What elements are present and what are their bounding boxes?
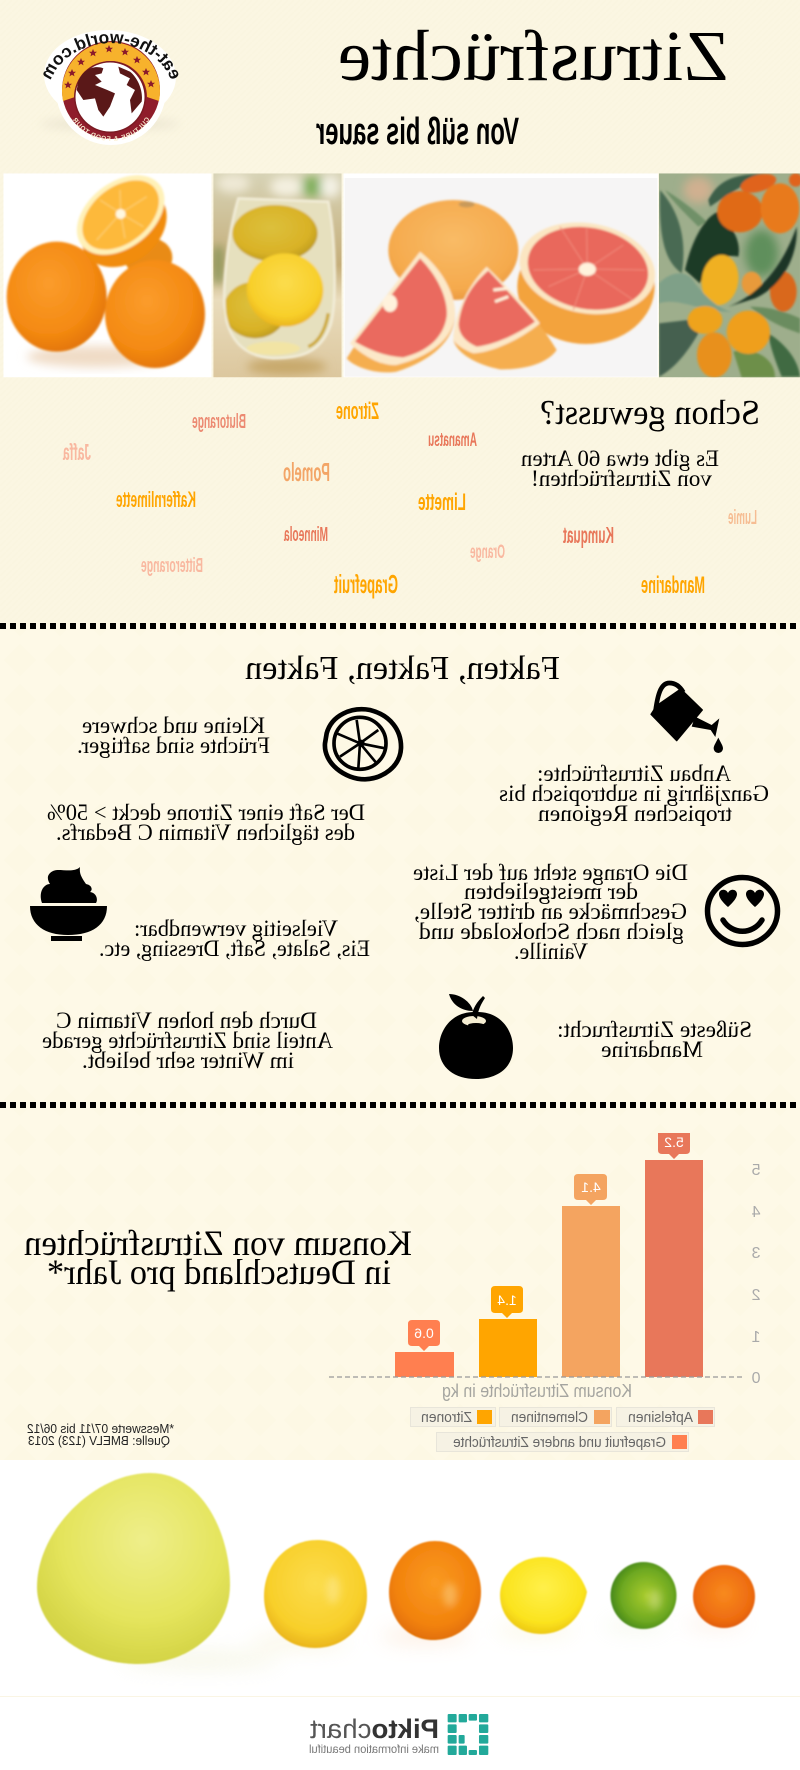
bar: Grapefruit 0.6: 0.6 — [414, 1325, 434, 1341]
fruit: mandarin — [693, 1565, 755, 1628]
legend item: Clementinen: Clementinen — [511, 1409, 588, 1426]
logo: eat-the-world.com badge — [43, 30, 178, 145]
fruit: yellow grapefruit — [264, 1540, 367, 1648]
bottom white background — [0, 1460, 800, 1770]
text: Süßeste: Süßeste Zitrusfrucht: — [557, 1017, 752, 1043]
word cloud: citrus varieties: Limette — [418, 489, 466, 516]
axis title: Konsum Zitrusfrüchte in kg — [442, 1381, 632, 1401]
text: Kleine Früchte — [77, 713, 270, 759]
y axis labels — [751, 1162, 760, 1387]
text: Saft einer Zitrone: Der Saft einer Zitrone deckt > 50% — [47, 800, 365, 826]
text: Anbau — [499, 761, 769, 827]
text: Kleine Früchte: Früchte sind saftiger. — [77, 733, 270, 759]
logo: eat-the-world.com badge: eat-the-world.com — [43, 34, 178, 80]
text: Vielseitig — [99, 916, 370, 962]
legend item: Apfelsinen: Apfelsinen — [628, 1409, 693, 1426]
text: Vielseitig: Vielseitig verwendbar: — [134, 916, 338, 942]
legend item: Zitronen: Zitronen — [421, 1409, 472, 1426]
icon: watering can — [651, 683, 723, 753]
y axis labels: 4 — [751, 1204, 760, 1221]
text: 60 Arten: von Zitrusfrüchten! — [531, 466, 712, 492]
fruit: lime — [610, 1562, 676, 1629]
wordmark: Piktochart — [309, 1714, 439, 1744]
bar: Apfelsinen 5.2: 5.2 — [664, 1134, 684, 1150]
text: Saft einer Zitrone: des täglichen Vitamin C Bedarfs. — [56, 820, 355, 846]
text: Winter — [42, 1008, 333, 1074]
text: 60 Arten — [521, 446, 719, 492]
heading: Konsum von Zitrusfrüchten: Konsum von Zitrusfrüchten — [24, 1223, 412, 1263]
shadows — [120, 1620, 745, 1668]
bar chart: consumption in kg — [329, 1133, 760, 1401]
icon: Piktochart mark — [448, 1714, 488, 1755]
logo: eat-the-world.com badge: CULTURE & FOOD TOUR — [72, 118, 149, 141]
word cloud: citrus varieties: Bitterorange — [141, 555, 203, 577]
text: Winter: Durch den hohen Vitamin C — [56, 1008, 317, 1034]
text: Kleine Früchte: Kleine und schwere — [82, 713, 265, 739]
word cloud: citrus varieties: Minneola — [284, 524, 328, 546]
word cloud: citrus varieties: Kumquat — [563, 522, 614, 548]
icon: citrus slice — [325, 709, 401, 779]
subtitle: Von süß bis sauer — [316, 111, 519, 153]
bar: Clementinen 4.1: 4.1 — [581, 1179, 601, 1195]
text: 60 Arten: Es gibt etwa 60 Arten — [521, 446, 719, 472]
text: Winter: Anteil sind Zitrusfrüchte gerade — [42, 1028, 333, 1054]
text: Süßeste: Mandarine — [601, 1037, 703, 1063]
text: Anbau: tropischen Regionen — [538, 801, 732, 827]
word cloud: citrus varieties: Amanatsu — [428, 430, 477, 451]
footnote — [27, 1422, 174, 1448]
bar: Zitronen 1.4 — [479, 1286, 537, 1377]
footnote: *Messwerte 07/11 bis 06/12 — [27, 1422, 174, 1436]
word cloud: citrus varieties — [63, 398, 757, 599]
heading: Konsum von Zitrusfrüchten — [24, 1223, 412, 1292]
title: Zitrusfrüchte — [338, 16, 729, 96]
legend item: Grapefruit: Grapefruit und andere Zitrusfrüchte — [453, 1434, 666, 1451]
text: Orange beliebt: Vainille. — [514, 939, 588, 965]
bar: Apfelsinen 5.2 — [645, 1133, 703, 1377]
legend item: Zitronen — [410, 1408, 496, 1426]
header background — [0, 0, 800, 173]
icon: smiley with heart eyes — [708, 878, 778, 944]
text: Orange beliebt: Die Orange steht auf der Liste — [413, 860, 688, 886]
text: Orange beliebt: Geschmäcke an dritter Stelle, — [414, 899, 687, 925]
word cloud: citrus varieties: Grapefruit — [334, 569, 398, 599]
text: Winter: im Winter sehr beliebt. — [82, 1048, 294, 1074]
word cloud: citrus varieties: Zitrone — [336, 398, 379, 425]
photo: lemons in a glass — [213, 173, 342, 377]
text: Anbau: Anbau Zitrusfrüchte: — [537, 761, 731, 787]
legend item: Clementinen — [500, 1408, 612, 1426]
photo: kumquats — [659, 171, 800, 378]
text: Orange beliebt — [413, 860, 688, 965]
footnote: Quelle: BMELV (123) 2013 — [28, 1434, 170, 1448]
text: Vielseitig: Eis, Salate, Saft, Dressing, etc. — [99, 936, 370, 962]
legend — [410, 1408, 714, 1452]
text: Süßeste — [557, 1017, 752, 1063]
text: Orange beliebt: der meistgeliebten — [464, 879, 638, 905]
section background: facts and chart — [0, 622, 800, 1460]
text: Saft einer Zitrone — [47, 800, 365, 846]
word cloud: citrus varieties: Lumie — [728, 507, 757, 529]
fruit: lemon — [500, 1557, 587, 1634]
y axis labels: 1 — [751, 1329, 760, 1346]
word cloud: citrus varieties: Blutorange — [192, 411, 246, 433]
heading: Fakten, Fakten, Fakten: Fakten, Fakten, Fakten — [245, 650, 560, 687]
word cloud: citrus varieties: Jaffa — [63, 439, 91, 465]
y axis labels: 5 — [751, 1162, 760, 1179]
legend item: Apfelsinen — [616, 1408, 714, 1426]
y axis labels: 0 — [751, 1370, 760, 1387]
fruit highlights — [326, 1576, 661, 1610]
word cloud: citrus varieties: Orange — [470, 542, 505, 563]
y axis labels: 2 — [751, 1287, 760, 1304]
y axis labels: 3 — [751, 1245, 760, 1262]
logo: Piktochart — [309, 1714, 488, 1756]
photo: oranges — [3, 159, 212, 377]
tagline: make information beautiful — [309, 1742, 439, 1756]
icon: fruit with leaf — [439, 994, 513, 1079]
icon: ice cream bowl — [30, 867, 107, 941]
heading: Konsum von Zitrusfrüchten: in Deutschland pro Jahr* — [47, 1252, 391, 1292]
word cloud: citrus varieties: Pomelo — [283, 457, 330, 487]
text: Anbau: Ganzjährig in subtropisch bis — [499, 781, 769, 807]
fruit: orange — [389, 1541, 481, 1640]
photo: grapefruit — [343, 173, 662, 377]
photo: row of citrus fruits — [37, 1473, 755, 1668]
bar: Grapefruit 0.6 — [395, 1320, 454, 1377]
bar: Clementinen 4.1 — [562, 1174, 620, 1377]
heading: Schon gewusst?: Schon gewusst? — [540, 393, 760, 432]
word cloud: citrus varieties: Kaffernlimette — [116, 487, 196, 512]
word cloud: citrus varieties: Mandarine — [641, 572, 705, 599]
text: Orange beliebt: gleich nach Schokolade und — [419, 919, 684, 945]
fruit: pomelo — [37, 1473, 230, 1664]
bar: Zitronen 1.4: 1.4 — [497, 1292, 517, 1308]
section background: did you know — [0, 173, 800, 622]
